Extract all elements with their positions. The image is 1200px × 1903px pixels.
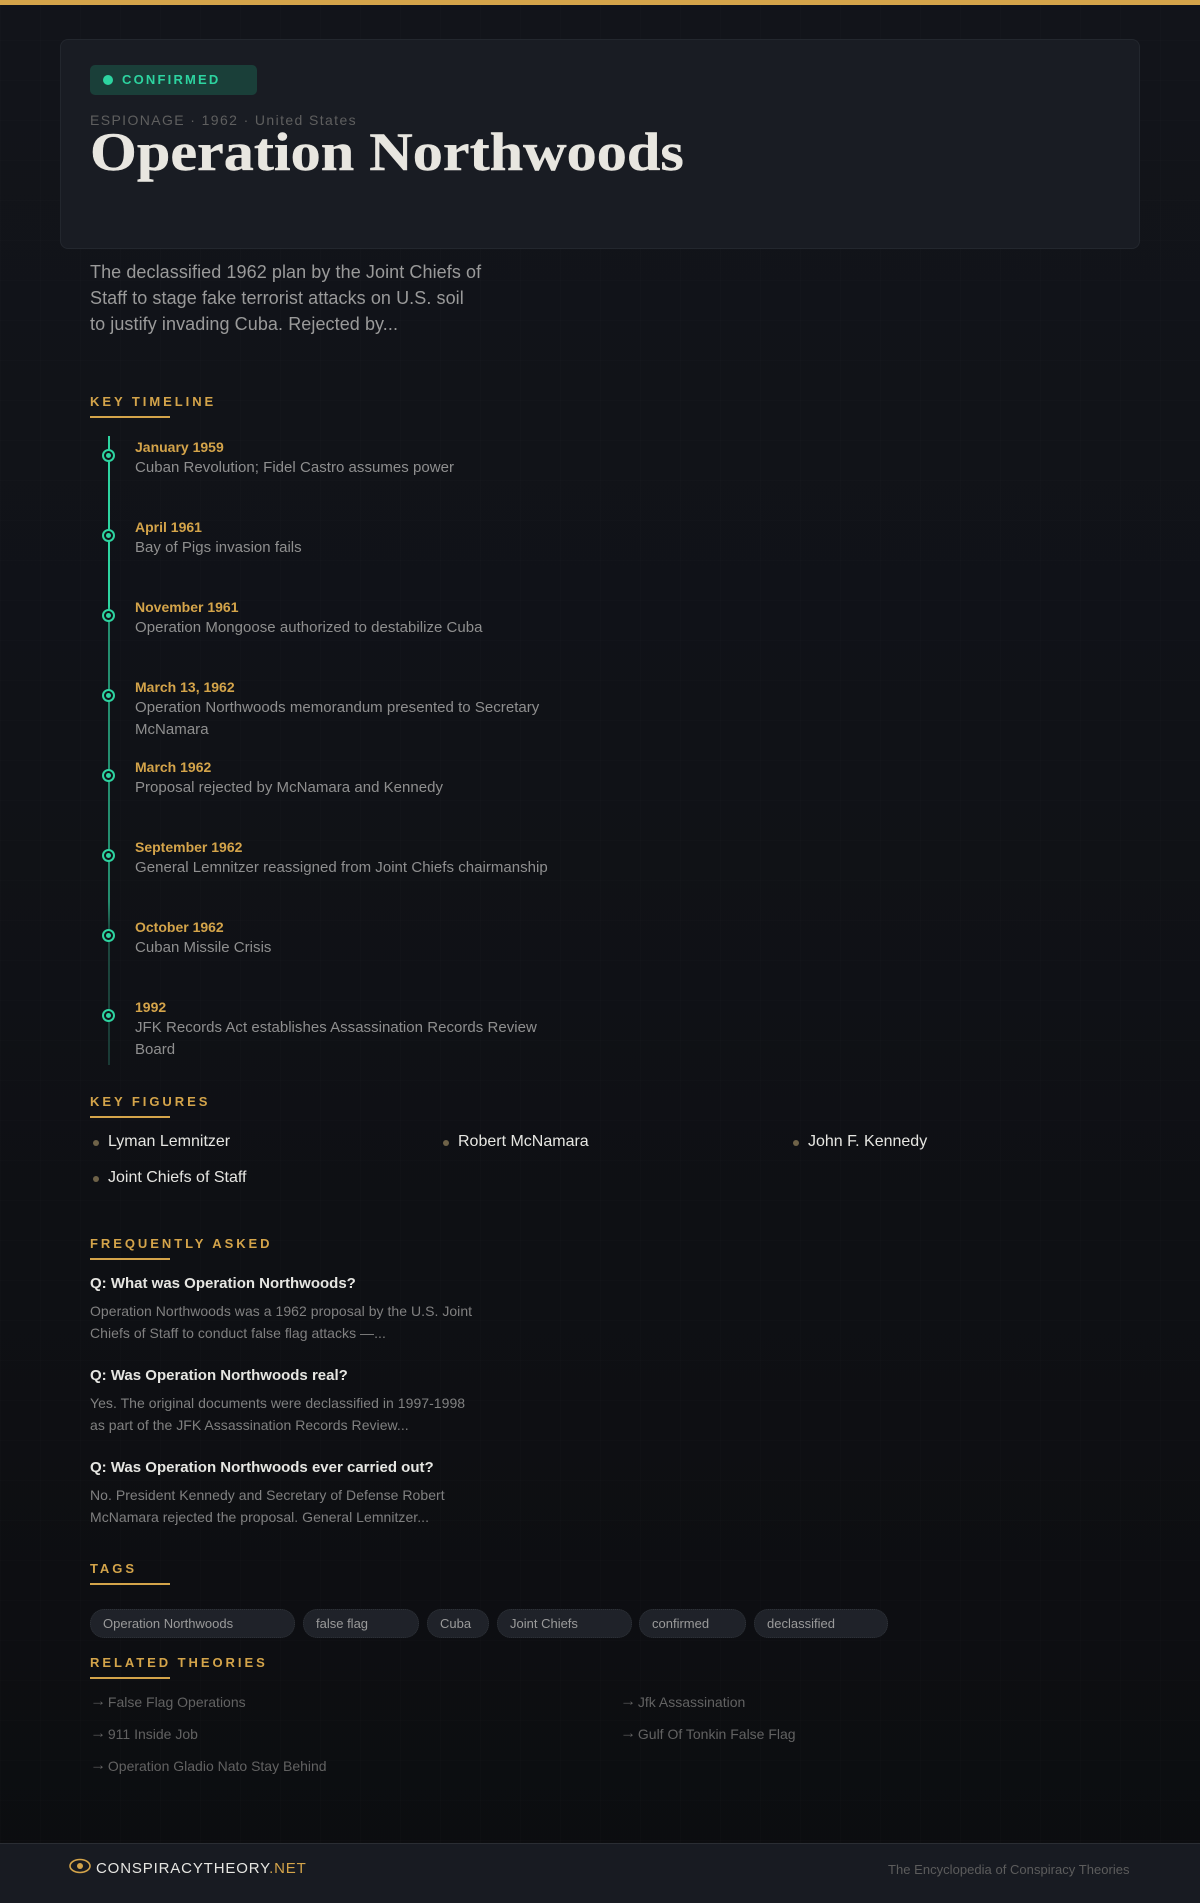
timeline event: March 13, 1962: McNamara bbox=[135, 721, 209, 738]
timeline event: March 13, 1962 bbox=[135, 679, 540, 738]
tag: declassified bbox=[754, 1609, 888, 1638]
top accent bar bbox=[0, 0, 1200, 5]
status badge bbox=[90, 65, 257, 95]
faq item 3: No. President Kennedy and Secretary of Defense Robert bbox=[90, 1487, 445, 1503]
title: Operation Northwoods bbox=[90, 122, 684, 182]
intro description: The declassified 1962 plan by the Joint Chiefs of bbox=[90, 262, 481, 282]
timeline event: 1992: JFK Records Act establishes Assassination Records Review bbox=[135, 1019, 537, 1036]
faq item 3 bbox=[90, 1459, 445, 1525]
tag: Cuba: Cuba bbox=[440, 1616, 471, 1631]
related: Gulf Of Tonkin False Flag: → bbox=[620, 1724, 636, 1740]
tag: Joint Chiefs: Joint Chiefs bbox=[510, 1616, 578, 1631]
timeline event: April 1961: April 1961 bbox=[135, 519, 202, 535]
icon: eye logo bbox=[69, 1858, 91, 1874]
related: Jfk Assassination: → bbox=[620, 1692, 636, 1708]
timeline event: September 1962: General Lemnitzer reassigned from Joint Chiefs chairmanship bbox=[135, 859, 548, 876]
related: Operation Gladio Nato Stay Behind: Operation Gladio Nato Stay Behind bbox=[108, 1758, 327, 1774]
timeline event: November 1961: November 1961 bbox=[135, 599, 239, 615]
faq item 1 bbox=[90, 1275, 472, 1341]
related: 911 Inside Job: → bbox=[90, 1724, 106, 1740]
timeline event: March 1962: Proposal rejected by McNamara and Kennedy bbox=[135, 779, 443, 796]
heading: frequently asked: FREQUENTLY ASKED bbox=[90, 1236, 273, 1251]
faq item 2: Yes. The original documents were declassified in 1997-1998 bbox=[90, 1395, 465, 1411]
related: Gulf Of Tonkin False Flag: Gulf Of Tonkin False Flag bbox=[638, 1726, 796, 1742]
tag: Operation Northwoods: Operation Northwoods bbox=[103, 1616, 233, 1631]
intro description: Staff to stage fake terrorist attacks on U.S. soil bbox=[90, 288, 464, 308]
timeline node 3 bbox=[102, 609, 115, 622]
tag: Joint Chiefs bbox=[497, 1609, 632, 1638]
timeline event: March 13, 1962: Operation Northwoods memorandum presented to Secretary bbox=[135, 699, 539, 716]
timeline event: January 1959: January 1959 bbox=[135, 439, 224, 455]
timeline event: October 1962: Cuban Missile Crisis bbox=[135, 939, 271, 956]
timeline event: 1992: Board bbox=[135, 1041, 175, 1058]
timeline node 8 bbox=[102, 1009, 115, 1022]
related: False Flag Operations: False Flag Operations bbox=[108, 1694, 246, 1710]
timeline node 2 bbox=[102, 529, 115, 542]
heading: tags: TAGS bbox=[90, 1561, 137, 1576]
heading: key timeline: KEY TIMELINE bbox=[90, 394, 216, 409]
footer brand: CONSPIRACYTHEORY.NET bbox=[96, 1860, 307, 1877]
badge dot bbox=[103, 75, 113, 85]
timeline event: November 1961 bbox=[135, 599, 483, 636]
intro description: to justify invading Cuba. Rejected by... bbox=[90, 314, 398, 334]
timeline node 4 bbox=[102, 689, 115, 702]
panel: timeline bbox=[108, 436, 110, 1065]
category meta line: ESPIONAGE · 1962 · United States bbox=[90, 112, 357, 128]
tag: declassified: declassified bbox=[767, 1616, 835, 1631]
timeline node 5 bbox=[102, 769, 115, 782]
tag: Cuba bbox=[427, 1609, 489, 1638]
faq item 1: Q: What was Operation Northwoods? bbox=[90, 1275, 356, 1292]
heading: key figures: KEY FIGURES bbox=[90, 1094, 210, 1109]
timeline event: January 1959 bbox=[135, 439, 454, 476]
intro description bbox=[90, 262, 482, 334]
heading: related theories: RELATED THEORIES bbox=[90, 1655, 268, 1670]
timeline event: March 1962 bbox=[135, 759, 443, 796]
timeline event: 1992: 1992 bbox=[135, 999, 166, 1015]
timeline event: March 13, 1962: March 13, 1962 bbox=[135, 679, 235, 695]
footer tagline: The Encyclopedia of Conspiracy Theories bbox=[888, 1862, 1130, 1877]
tag: false flag: false flag bbox=[316, 1616, 368, 1631]
figure: John F. Kennedy: John F. Kennedy bbox=[808, 1133, 927, 1150]
related: Operation Gladio Nato Stay Behind: → bbox=[90, 1756, 106, 1772]
timeline event: 1992 bbox=[135, 999, 537, 1058]
badge label: CONFIRMED bbox=[122, 72, 221, 87]
timeline node 6 bbox=[102, 849, 115, 862]
figure: Robert McNamara: Robert McNamara bbox=[458, 1133, 589, 1150]
faq item 1: Operation Northwoods was a 1962 proposal by the U.S. Joint bbox=[90, 1303, 472, 1319]
panel: header card bbox=[60, 39, 1140, 249]
related: Jfk Assassination: Jfk Assassination bbox=[638, 1694, 745, 1710]
footer bar bbox=[0, 1843, 1200, 1903]
faq item 3: McNamara rejected the proposal. General Lemnitzer... bbox=[90, 1509, 429, 1525]
timeline event: March 1962: March 1962 bbox=[135, 759, 211, 775]
tag: false flag bbox=[303, 1609, 419, 1638]
tag: Operation Northwoods bbox=[90, 1609, 295, 1638]
figure: Lyman Lemnitzer: Lyman Lemnitzer bbox=[108, 1133, 230, 1150]
timeline spine bbox=[108, 436, 110, 1065]
faq item 1: Chiefs of Staff to conduct false flag attacks —... bbox=[90, 1325, 386, 1341]
faq item 3: Q: Was Operation Northwoods ever carried out? bbox=[90, 1459, 434, 1476]
timeline event: October 1962: October 1962 bbox=[135, 919, 224, 935]
timeline event: September 1962: September 1962 bbox=[135, 839, 242, 855]
timeline event: April 1961: Bay of Pigs invasion fails bbox=[135, 539, 302, 556]
timeline event: October 1962 bbox=[135, 919, 271, 956]
related: False Flag Operations: → bbox=[90, 1692, 106, 1708]
timeline event: January 1959: Cuban Revolution; Fidel Castro assumes power bbox=[135, 459, 454, 476]
related: 911 Inside Job: 911 Inside Job bbox=[108, 1726, 198, 1742]
tag: confirmed bbox=[639, 1609, 746, 1638]
timeline node 1 bbox=[102, 449, 115, 462]
timeline event: April 1961 bbox=[135, 519, 302, 556]
timeline node 7 bbox=[102, 929, 115, 942]
faq item 2 bbox=[90, 1367, 465, 1433]
timeline event: November 1961: Operation Mongoose authorized to destabilize Cuba bbox=[135, 619, 483, 636]
figure: Joint Chiefs of Staff: Joint Chiefs of Staff bbox=[108, 1169, 246, 1186]
faq item 2: as part of the JFK Assassination Records Review... bbox=[90, 1417, 409, 1433]
timeline event: September 1962 bbox=[135, 839, 548, 876]
faq item 2: Q: Was Operation Northwoods real? bbox=[90, 1367, 348, 1384]
tag: confirmed: confirmed bbox=[652, 1616, 709, 1631]
